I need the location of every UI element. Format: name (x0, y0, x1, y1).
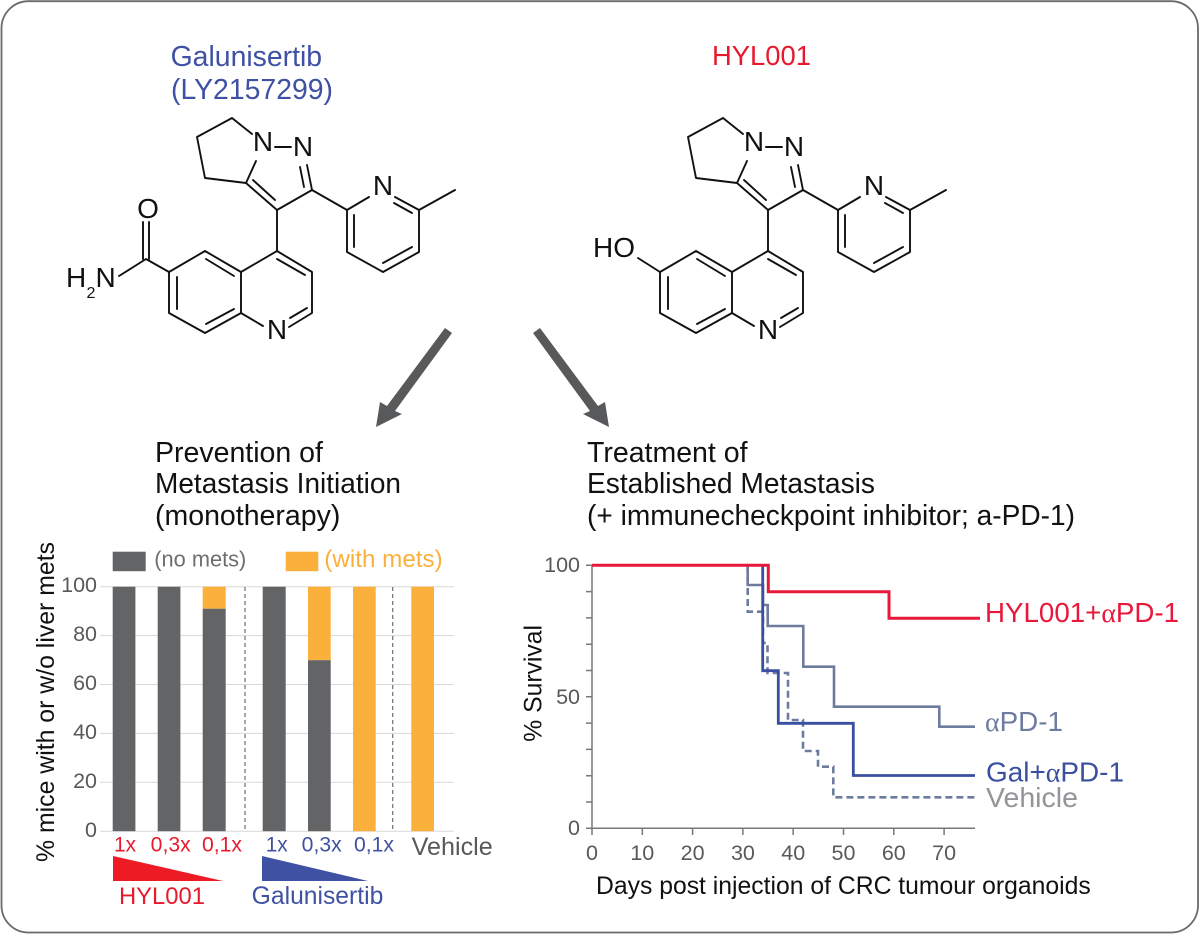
x labels: HYL001 doses (114, 834, 242, 857)
x labels: Galunisertib doses: 0,3x (302, 834, 342, 857)
molecule: Galunisertib structure: N (293, 131, 313, 162)
axis numbers: 60 (882, 841, 906, 865)
molecule: Galunisertib structure: N (267, 314, 287, 345)
arrow: to treatment (533, 328, 609, 427)
molecule: Galunisertib structure: 2 (86, 285, 96, 302)
axis numbers (544, 553, 956, 865)
heading: Prevention of Metastasis Initiation: (monotherapy) (155, 500, 340, 532)
axis numbers: 10 (630, 841, 654, 865)
arrow: to prevention (376, 328, 452, 427)
axis numbers: 30 (731, 841, 755, 865)
molecule: Galunisertib structure: N (96, 262, 116, 293)
axis numbers: 20 (681, 841, 705, 865)
series label: aPD-1: αPD-1 (985, 706, 1063, 737)
molecule: HYL001 structure: N (864, 170, 884, 201)
heading: Treatment of Established Metastasis: Established Metastasis (587, 468, 875, 500)
series label: Vehicle: Vehicle (986, 782, 1078, 813)
molecule: HYL001 structure (593, 118, 946, 345)
axis numbers: 100 (544, 553, 580, 577)
axis numbers: 0 (586, 841, 598, 865)
molecule: Galunisertib structure: O (137, 193, 159, 224)
x labels: HYL001 doses: 1x (114, 834, 136, 857)
molecule: HYL001 structure: HO (593, 232, 635, 263)
series label: Gal: Gal+αPD-1 (986, 757, 1124, 788)
heading: Prevention of Metastasis Initiation: Prevention of (155, 437, 323, 469)
label: Galunisertib: Galunisertib (252, 883, 383, 910)
molecule: HYL001 structure: N (758, 314, 778, 345)
curve: Gal+aPD-1 (763, 566, 975, 776)
molecule: Galunisertib structure (66, 118, 455, 345)
heading: Prevention of Metastasis Initiation (155, 437, 401, 532)
axis numbers: 70 (932, 841, 956, 865)
y axis labels: 60 (73, 671, 97, 695)
label: HYL001: HYL001 (119, 883, 205, 910)
title: Galunisertib: Galunisertib (171, 40, 322, 72)
y axis labels: 80 (73, 622, 97, 646)
molecule: HYL001 structure: N (784, 131, 804, 162)
heading: Treatment of Established Metastasis (587, 437, 1075, 532)
y axis title: % Survival (521, 625, 548, 742)
bars (113, 587, 434, 831)
molecule: Galunisertib structure: H (66, 262, 86, 293)
legend: with mets: (with mets) (324, 546, 443, 573)
molecule: HYL001 structure: N (744, 126, 764, 157)
title: HYL001: HYL001 (712, 40, 811, 71)
heading: Treatment of Established Metastasis: (+ immunecheckpoint inhibitor; a-PD-1) (587, 500, 1075, 532)
survival chart (521, 553, 1179, 900)
x label: Vehicle: Vehicle (412, 834, 493, 861)
y axis title: % mice with or w/o liver mets (33, 542, 60, 862)
axis numbers: 40 (781, 841, 805, 865)
curve: aPD-1 (748, 566, 975, 727)
axis numbers: 50 (556, 685, 580, 709)
dose wedge: HYL001 (113, 856, 223, 881)
x axis title: Days post injection of CRC tumour organoids (596, 873, 1091, 900)
legend: no mets (113, 547, 246, 572)
y axis labels (61, 573, 97, 842)
y axis labels: 40 (73, 720, 97, 744)
legend: no mets: (no mets) (154, 547, 246, 572)
y axis labels: 0 (85, 818, 97, 842)
axes (586, 565, 975, 835)
molecule: Galunisertib structure: N (373, 170, 393, 201)
curve: HYL001+aPD-1 (592, 565, 980, 618)
dose wedge: Galunisertib (262, 856, 368, 881)
x labels: HYL001 doses: 0,1x (202, 834, 242, 857)
x labels: Galunisertib doses (266, 834, 394, 857)
series label: HYL001: HYL001+αPD-1 (985, 597, 1179, 628)
y axis labels: 20 (73, 769, 97, 793)
heading: Prevention of Metastasis Initiation: Metastasis Initiation (155, 468, 401, 500)
heading: Treatment of Established Metastasis: Treatment of (587, 437, 748, 469)
curve: Vehicle (748, 566, 975, 797)
y axis labels: 100 (61, 573, 97, 597)
x labels: Galunisertib doses: 1x (266, 834, 288, 857)
bar chart: liver metastases (33, 542, 493, 910)
axis numbers: 50 (832, 841, 855, 865)
title: Galunisertib (171, 40, 333, 105)
title: Galunisertib: (LY2157299) (171, 73, 333, 105)
molecule: Galunisertib structure: N (253, 126, 273, 157)
axis numbers: 0 (568, 816, 580, 840)
x labels: HYL001 doses: 0,3x (151, 834, 191, 857)
x labels: Galunisertib doses: 0,1x (354, 834, 394, 857)
